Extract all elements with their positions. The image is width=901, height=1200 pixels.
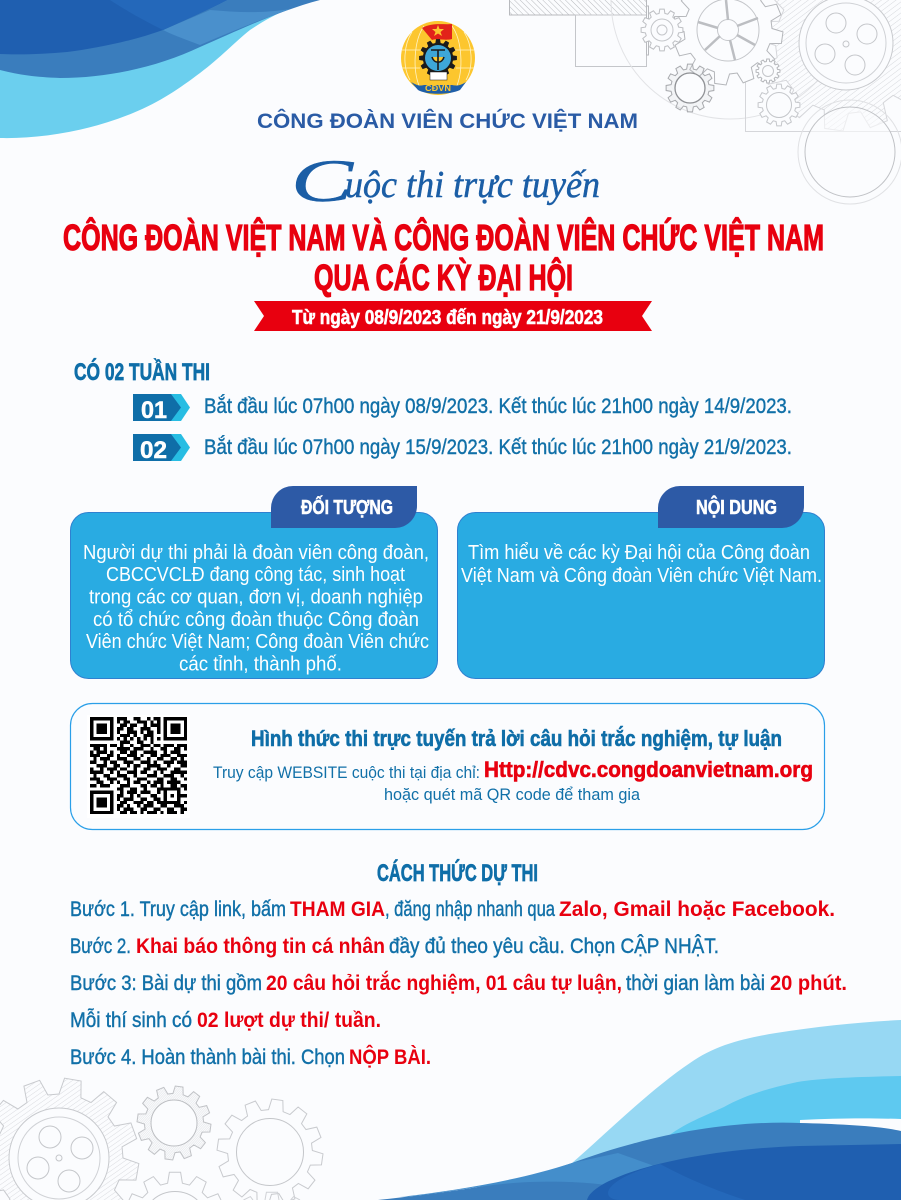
panel: target participants <box>70 486 438 678</box>
script title: uộc thi trực tuyến <box>345 164 600 206</box>
decoration: top-left waves <box>0 0 320 138</box>
panel body text: Việt Nam và Công đoàn Viên chức Việt Nam. <box>461 565 822 587</box>
step 4: Bước 4. Hoàn thành bài thi. Chọn <box>70 1046 345 1069</box>
step 1 <box>70 898 835 921</box>
heading: two weeks: CÓ 02 TUẦN THI <box>74 358 210 386</box>
week 2: Bắt đầu lúc 07h00 ngày 15/9/2023. Kết thúc lúc 21h00 ngày 21/9/2023. <box>204 436 792 459</box>
access line <box>213 757 813 782</box>
panel body text: trong các cơ quan, đơn vị, doanh nghiệp <box>89 586 423 608</box>
week 2 <box>133 434 792 464</box>
panel: online format and QR code <box>70 704 824 830</box>
step 3: Bước 3: Bài dự thi gồm <box>70 972 262 995</box>
attempts per week: Mỗi thí sinh có <box>70 1009 192 1032</box>
script title: C <box>291 148 355 214</box>
step 2: Bước 2. <box>70 935 131 958</box>
step 3: thời gian làm bài <box>626 972 765 995</box>
decoration: bottom-right waves <box>378 1020 901 1200</box>
step 1: Bước 1. Truy cập link, bấm <box>70 898 286 921</box>
panel body text: Viên chức Việt Nam; Công đoàn Viên chức <box>86 631 429 653</box>
step 1: , đăng nhập nhanh qua <box>385 898 555 921</box>
logo ribbon text: CĐVN <box>425 84 451 93</box>
week 2: 02 <box>140 437 167 464</box>
attempts per week: 02 lượt dự thi/ tuần. <box>197 1009 381 1032</box>
panel body text: Tìm hiểu về các kỳ Đại hội của Công đoàn <box>468 542 810 564</box>
step 3 <box>70 971 847 995</box>
attempts per week <box>70 1009 381 1032</box>
heading: how to enter: CÁCH THỨC DỰ THI <box>377 859 538 887</box>
icon: trade union logo <box>401 21 475 95</box>
week 1 <box>133 394 792 424</box>
step 3: 20 phút. <box>770 972 847 995</box>
step 2: Khai báo thông tin cá nhân <box>136 935 385 958</box>
panel body text: CBCCVCLĐ đang công tác, sinh hoạt <box>106 564 405 586</box>
panel body text: các tỉnh, thành phố. <box>179 654 342 676</box>
step 2 <box>70 935 719 958</box>
decoration: bottom-left gears <box>0 1066 330 1200</box>
step 3: 20 câu hỏi trắc nghiệm, 01 câu tự luận, <box>266 971 622 995</box>
step 2: đầy đủ theo yêu cầu. Chọn CẬP NHẬT. <box>389 935 719 958</box>
date ribbon: Từ ngày 08/9/2023 đến ngày 21/9/2023 <box>292 307 603 329</box>
access line: Http://cdvc.congdoanvietnam.org <box>484 757 813 782</box>
step 1: THAM GIA <box>290 898 385 921</box>
main heading <box>63 216 824 298</box>
step 4: NỘP BÀI. <box>349 1045 431 1069</box>
week 1: 01 <box>141 397 167 424</box>
panel body text <box>83 542 429 676</box>
step 1: Zalo, Gmail hoặc Facebook. <box>559 898 835 921</box>
QR instruction: hoặc quét mã QR code để tham gia <box>384 785 641 804</box>
panel: content <box>458 486 824 678</box>
icon: QR code <box>87 715 190 818</box>
date ribbon <box>254 301 652 331</box>
panel body text <box>461 542 822 587</box>
week 1: Bắt đầu lúc 07h00 ngày 08/9/2023. Kết thúc lúc 21h00 ngày 14/9/2023. <box>204 395 792 418</box>
main heading: QUA CÁC KỲ ĐẠI HỘI <box>314 256 573 298</box>
organisation name: CÔNG ĐOÀN VIÊN CHỨC VIỆT NAM <box>257 109 638 133</box>
panel: content: NỘI DUNG <box>696 495 777 519</box>
decoration: top-right gears and technical drawing <box>510 0 901 204</box>
panel: target participants: ĐỐI TƯỢNG <box>301 495 393 519</box>
panel body text: Người dự thi phải là đoàn viên công đoàn, <box>83 542 429 564</box>
format heading: Hình thức thi trực tuyến trả lời câu hỏi trắc nghiệm, tự luận <box>251 726 782 751</box>
access line: Truy cập WEBSITE cuộc thi tại địa chỉ: <box>213 763 480 782</box>
panel body text: có tổ chức công đoàn thuộc Công đoàn <box>93 609 419 631</box>
